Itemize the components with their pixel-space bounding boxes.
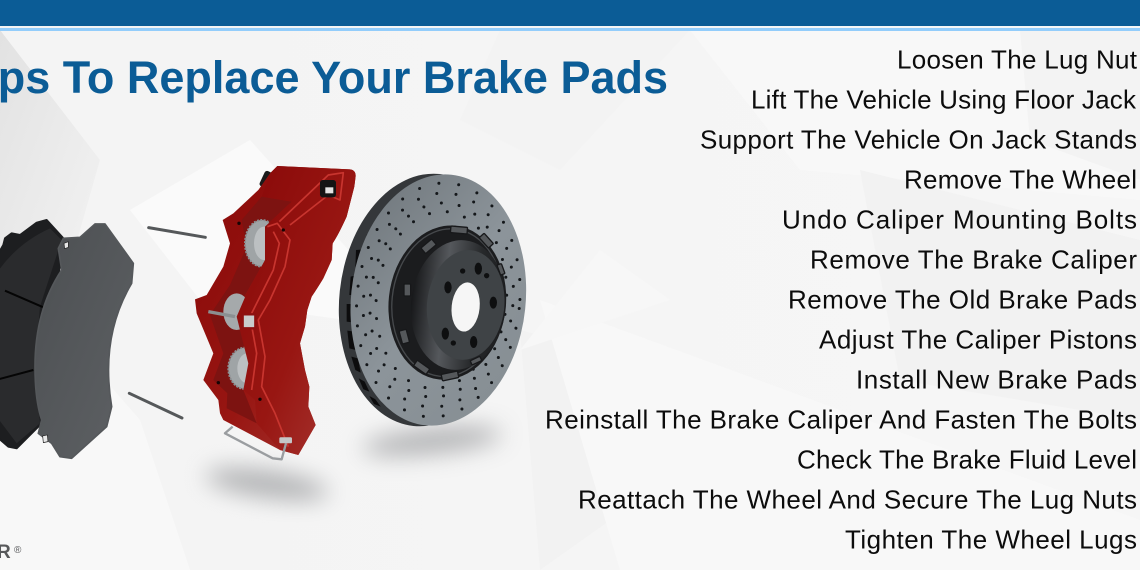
caliper pistons <box>223 220 278 389</box>
disc edge with vents <box>327 165 527 435</box>
red caliper <box>195 166 356 459</box>
caliper cavity <box>210 197 292 423</box>
steps list: Remove The Brake Caliper <box>810 244 1137 274</box>
brake pads <box>0 220 133 458</box>
mounting clips <box>399 226 505 381</box>
caliper body <box>195 166 356 455</box>
front pad <box>35 224 133 458</box>
steps list: Undo Caliper Mounting Bolts <box>782 204 1137 234</box>
steps list: Check The Brake Fluid Level <box>797 444 1137 474</box>
brake shadows <box>204 422 503 506</box>
steps list: Remove The Wheel <box>904 164 1137 194</box>
header bar <box>0 0 1140 26</box>
brake disc <box>327 165 538 435</box>
caliper guide pin and bolts <box>208 312 235 317</box>
steps list: Install New Brake Pads <box>856 364 1137 394</box>
back pad <box>0 220 63 448</box>
wheel bolt holes <box>442 263 497 348</box>
caliper bolts behind <box>259 170 276 190</box>
caliper rib highlights <box>250 173 343 447</box>
caliper outer face <box>237 166 356 455</box>
steps list: Support The Vehicle On Jack Stands <box>700 124 1137 154</box>
steps list: Reattach The Wheel And Secure The Lug Nuts <box>578 484 1137 514</box>
steps list: Reinstall The Brake Caliper And Fasten The Bolts <box>545 404 1137 434</box>
steps list: Loosen The Lug Nut <box>897 44 1138 74</box>
guide pins <box>129 228 205 418</box>
logo fragment: ® <box>14 545 22 556</box>
hub face <box>421 246 510 364</box>
steps list: Remove The Old Brake Pads <box>788 284 1137 314</box>
hub flange <box>381 220 514 386</box>
steps list: Adjust The Caliper Pistons <box>819 324 1137 354</box>
steps list: Lift The Vehicle Using Floor Jack <box>751 84 1137 114</box>
disc friction face <box>338 166 538 434</box>
logo fragment <box>0 542 22 563</box>
header accent line <box>0 28 1140 31</box>
drilled holes <box>345 175 531 425</box>
hub bell <box>404 235 512 375</box>
steps list <box>545 44 1138 554</box>
steps list: Tighten The Wheel Lugs <box>845 524 1137 554</box>
centre bore <box>449 281 482 333</box>
retaining clip <box>225 427 286 459</box>
